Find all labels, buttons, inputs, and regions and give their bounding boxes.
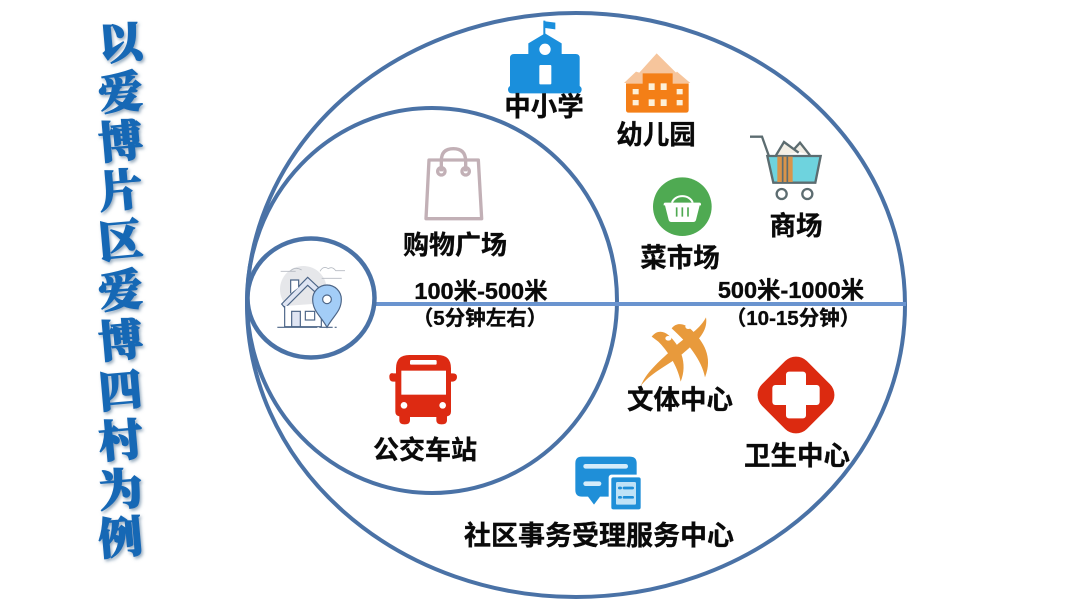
title: vertical heading: 博 <box>96 104 145 172</box>
icon: kindergarten <box>624 53 690 113</box>
time label: 10-15 minutes: （10-15分钟） <box>726 307 860 330</box>
title: vertical heading: 爱 <box>94 253 145 321</box>
label: kindergarten: 幼儿园 <box>616 120 696 150</box>
title: vertical heading: 例 <box>96 500 145 568</box>
title: vertical heading: 爱 <box>94 55 145 123</box>
icon: community service chat form <box>575 457 643 512</box>
inner circle: 5 minute range <box>247 108 617 493</box>
outer circle: 10-15 minute range <box>247 13 905 597</box>
distance label: 500-1000m: 500米-1000米 <box>718 277 864 303</box>
icon: house with location pin <box>277 266 346 327</box>
icon: shopping bag <box>426 149 482 219</box>
label: shopping plaza: 购物广场 <box>403 230 507 260</box>
title: vertical heading: 为 <box>96 452 145 520</box>
title: vertical heading <box>94 5 149 568</box>
time label: about 5 minutes: （5分钟左右） <box>413 307 547 330</box>
label: vegetable market: 菜市场 <box>640 243 720 273</box>
icon: vegetable market basket <box>653 177 712 236</box>
centre circle <box>248 238 374 358</box>
label: health centre: 卫生中心 <box>744 441 850 471</box>
label: culture and sports centre: 文体中心 <box>627 385 733 415</box>
icon: culture and sports figures <box>641 317 708 386</box>
title: vertical heading: 以 <box>96 5 149 73</box>
distance label: 100-500m: 100米-500米 <box>414 278 548 304</box>
label: bus station: 公交车站 <box>373 435 477 465</box>
icon: primary and middle school <box>508 21 582 93</box>
title: vertical heading: 片 <box>96 153 145 221</box>
title: vertical heading: 村 <box>96 403 145 471</box>
icon: bus <box>389 355 457 424</box>
icon: red medical cross <box>751 350 841 440</box>
icon: shopping cart <box>750 137 821 199</box>
title: vertical heading: 区 <box>96 203 145 271</box>
label: shopping mall: 商场 <box>770 211 822 241</box>
label: primary and middle school: 中小学 <box>504 92 584 122</box>
title: vertical heading: 四 <box>96 353 145 421</box>
label: community affairs service centre: 社区事务受理服务中心 <box>464 521 734 551</box>
radius line <box>373 302 906 306</box>
title: vertical heading: 博 <box>96 303 145 371</box>
